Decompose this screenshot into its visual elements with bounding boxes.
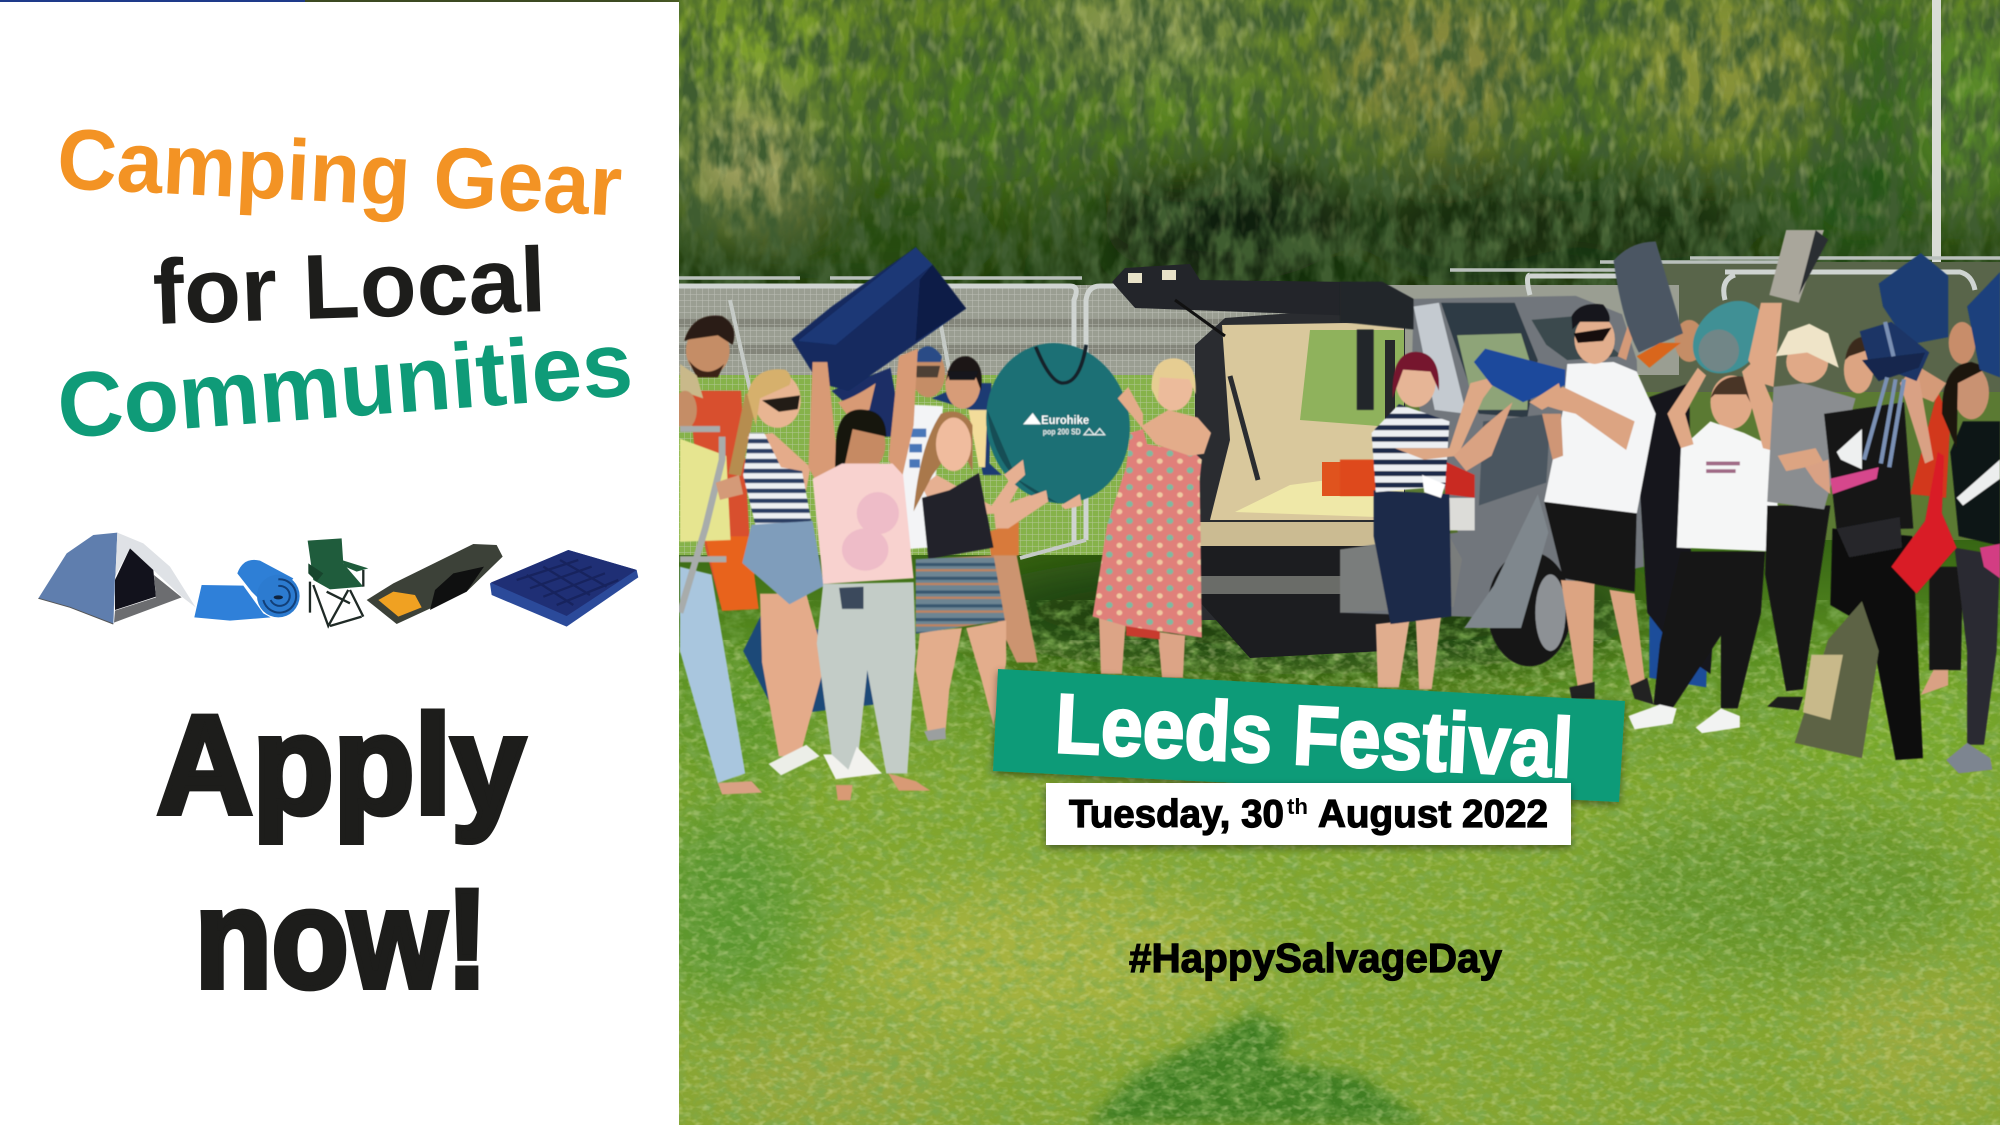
green tent bag on the ground (1795, 601, 1879, 758)
woman with red bag (1891, 362, 2000, 773)
hands on blue bag (1529, 383, 1563, 410)
cta line: now!: now! (195, 860, 488, 1017)
camping gear icons row (38, 533, 638, 627)
old lady with maroon hair and striped shirt (1372, 352, 1513, 689)
icon: folding chair (308, 538, 368, 626)
icon: air mattress (490, 550, 638, 627)
car side (1340, 282, 1644, 666)
people right group (1340, 230, 2000, 773)
man in white tee (1534, 304, 1656, 705)
background behind the crowd (1319, 262, 2000, 570)
hashtag: #HappySalvageDay (1129, 935, 1502, 981)
top edge strip: navy (0, 0, 305, 2)
top edge strip: photo edge (305, 0, 679, 2)
heading: Camping Gear for Local Communities (54, 111, 636, 458)
rolled camping mat (1769, 230, 1828, 303)
brand label: Eurohike: Eurohike (1041, 413, 1089, 427)
blue sleeping bag on the ground (1649, 617, 1708, 687)
white panel (0, 2, 679, 1125)
banner title: Leeds Festival (1053, 676, 1575, 795)
date: Tuesday, 30: Tuesday, 30 (1069, 793, 1284, 836)
icon: tent (38, 533, 196, 624)
trees background (670, 0, 2000, 300)
lamp pole (1932, 0, 1941, 265)
girl in black top and patterned shorts (914, 412, 1048, 741)
metal fence (679, 258, 2000, 558)
grass field (640, 540, 2000, 1125)
woman with bucket hat (1748, 303, 1856, 710)
teal pop-up tent disc (975, 335, 1141, 512)
icon: rolled sleeping mat (194, 560, 300, 621)
date: August 2022: August 2022 (1318, 793, 1548, 836)
girl with braid and striped top (716, 369, 825, 775)
date box (1046, 783, 1571, 845)
folded chair in bag (1860, 253, 1948, 467)
grey tent bag (1614, 241, 1683, 352)
teal stuff sack ball (1678, 288, 1781, 386)
woman in red floral dress (1092, 358, 1211, 678)
navy bag top right (1967, 272, 2000, 377)
banner: Leeds Festival (993, 669, 1625, 802)
tailgate (1112, 264, 1416, 318)
person in black band tee (1805, 337, 1933, 760)
shadow on the grass (1085, 1012, 1430, 1125)
people left group (673, 247, 1211, 800)
photo: festival camping gear group on grass (640, 0, 2000, 1125)
person in black behind (1618, 318, 1715, 674)
date: superscript th: th (1287, 794, 1308, 819)
car (1112, 264, 1416, 658)
brand label: pop 200 SD: pop 200 SD (1043, 427, 1081, 437)
person with hat, chair and jeans (673, 364, 762, 794)
big navy bag (792, 247, 966, 391)
woman with raised arms and pink shirt (808, 349, 930, 800)
man in back with cap and white top (832, 346, 945, 550)
cta line: Apply: Apply (157, 686, 525, 843)
call to action: Apply now! (157, 686, 525, 1017)
heading line: Communities: Communities (54, 313, 636, 458)
man in red shirt (684, 316, 759, 611)
tarp bag on the ground (743, 609, 874, 716)
white shirt girl (1628, 360, 1782, 733)
heading line: Camping Gear: Camping Gear (55, 111, 624, 235)
woman in back with navy jacket (932, 356, 1038, 662)
blue sleeping bag held up (1474, 349, 1565, 402)
woman in red behind right (1906, 322, 1976, 695)
hands on tent (1004, 460, 1082, 509)
heading line: for Local: for Local (151, 229, 547, 344)
icon: sleeping bag (367, 544, 503, 624)
